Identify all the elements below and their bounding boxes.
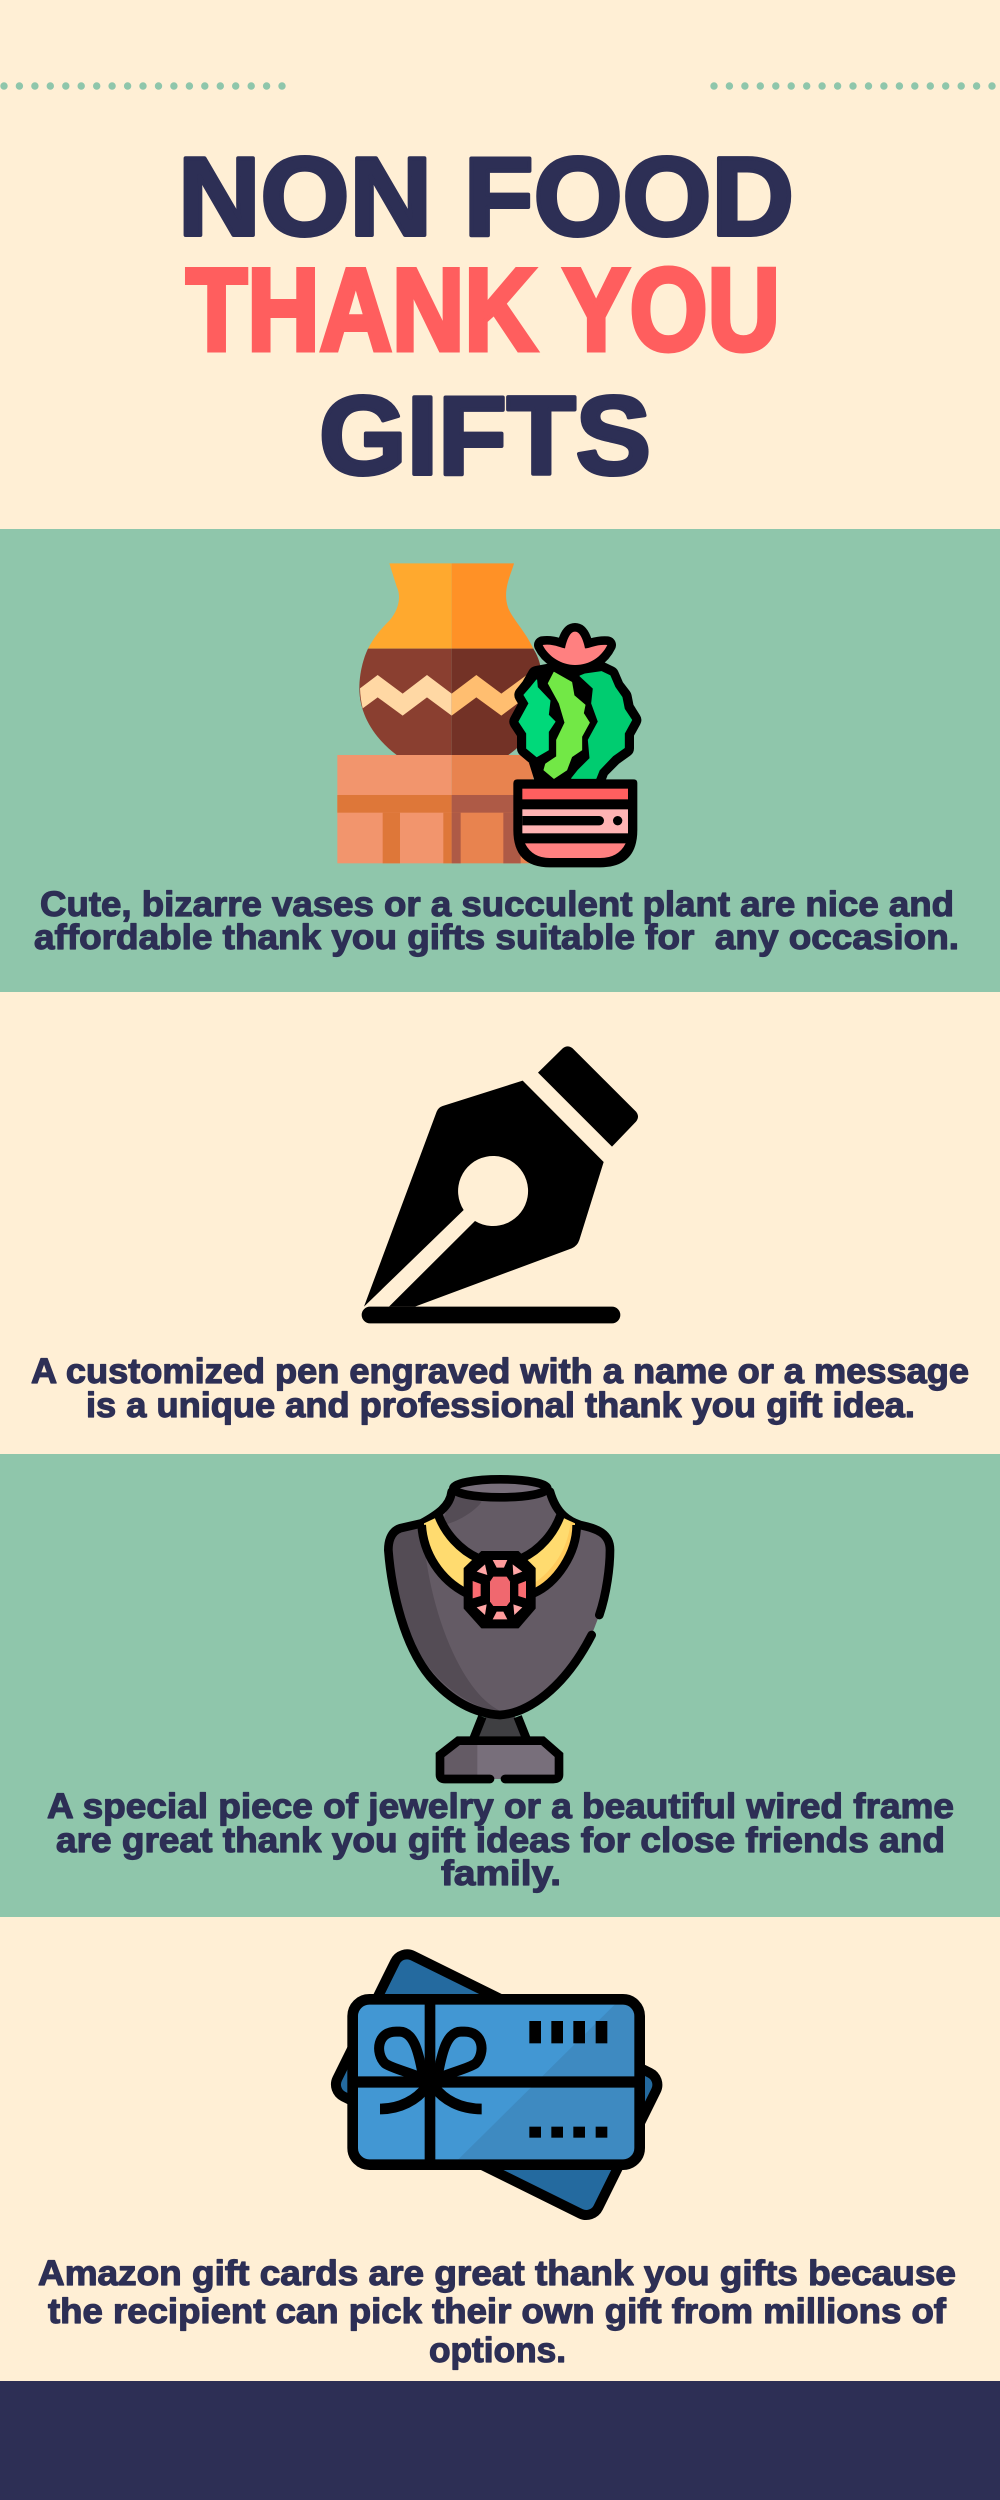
table [337,755,533,863]
dotted line: right [710,82,996,90]
icon: fountain pen nib [362,1046,638,1323]
dotted line: left [0,82,286,90]
icon: vase on table with cactus [337,563,637,867]
front card [353,1999,640,2165]
header panel [0,0,1000,529]
caption: gift cards: options. [429,2331,566,2370]
caption: gift cards: Amazon gift cards are great thank you gifts because [38,2254,956,2293]
ribbon and bow [353,1999,640,2165]
flower pot [513,779,637,867]
panel: jewelry [0,1454,1000,1917]
icon: necklace on bust [388,1479,610,1779]
cactus [518,668,632,779]
bust collar [453,1479,547,1497]
caption: jewelry [47,1787,954,1893]
gold necklace [422,1515,577,1593]
card number marks [529,2021,607,2138]
title [178,135,794,498]
caption: vases and succulents: affordable thank you gifts suitable for any occasion. [34,918,959,957]
panel: vases and succulents [0,529,1000,992]
bust [388,1492,610,1715]
caption: customized pen: A customized pen engraved with a name or a message [31,1352,969,1391]
icon: gift cards [331,1950,662,2220]
back card [331,1950,662,2220]
gem [464,1552,535,1628]
vase [359,563,542,755]
caption: customized pen [31,1352,969,1425]
footer bar [0,2381,1000,2500]
cactus flower [543,632,607,665]
caption: vases and succulents [34,885,959,957]
panel: gift cards [0,1917,1000,2381]
caption: jewelry: family. [441,1854,561,1893]
title line: non food: NON FOOD [178,135,794,259]
caption: jewelry: A special piece of jewelry or a beautiful wired frame [47,1787,954,1826]
caption: vases and succulents: Cute, bizarre vases or a succulent plant are nice and [40,885,954,924]
bust stem [473,1717,527,1739]
caption: jewelry: are great thank you gift ideas for close friends and [56,1821,945,1860]
title line: thank you: THANK YOU [186,244,780,375]
bust base [440,1741,559,1779]
panel: customized pen [0,992,1000,1454]
caption: gift cards: the recipient can pick their own gift from millions of [48,2292,946,2331]
title line: gifts: GIFTS [319,374,651,498]
caption: customized pen: is a unique and professional thank you gift idea. [86,1386,915,1425]
caption: gift cards [38,2254,956,2370]
